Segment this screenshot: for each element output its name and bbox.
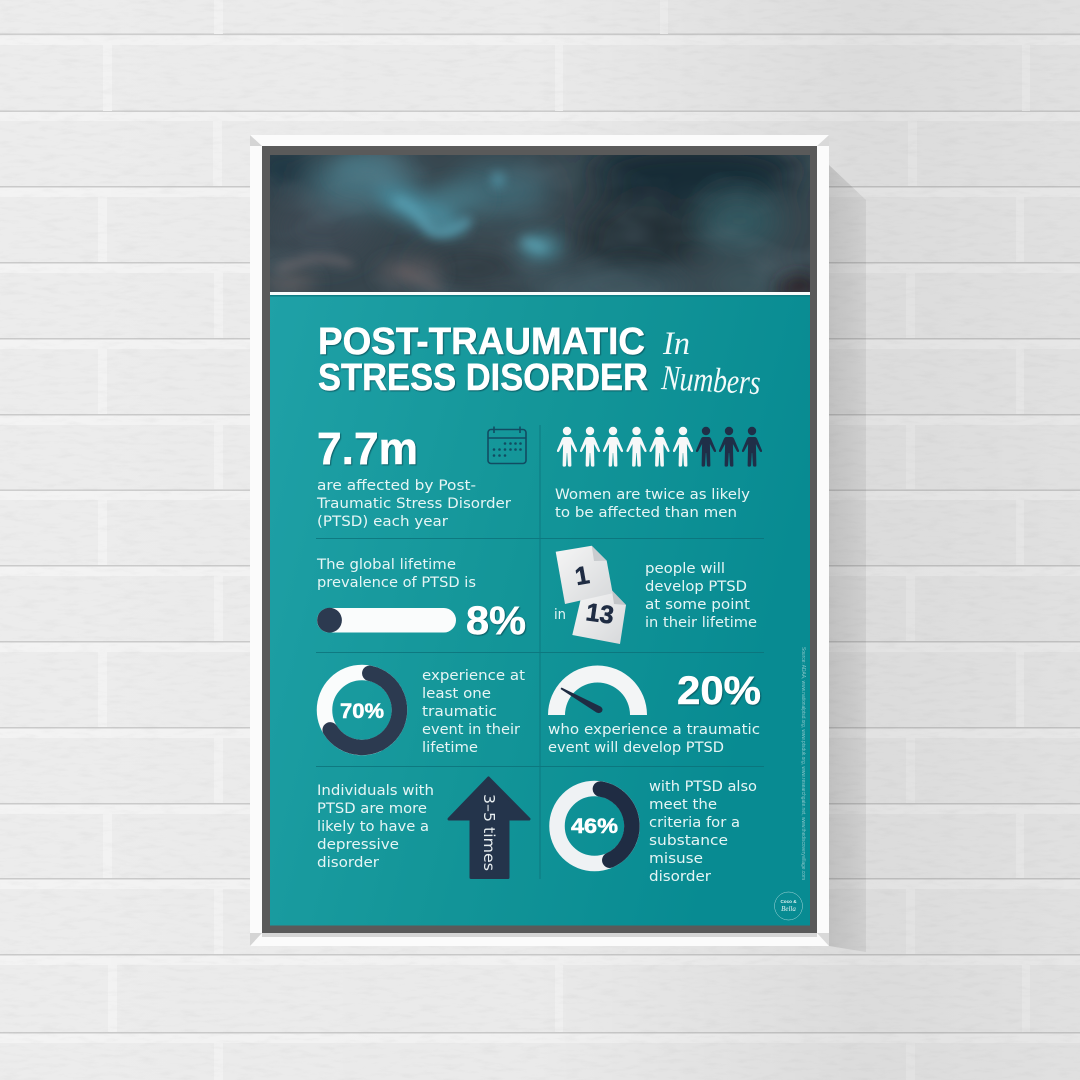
stat: 7.7m [316,423,526,530]
text: depressive disorder: depressive [317,836,399,853]
arrow: 3-5 times: 3–5 times [480,794,498,871]
text: depressive disorder: likely to have a [317,818,429,835]
text: substance misuse disorder: meet the [649,796,717,813]
logo: Coco and Bella [774,892,802,920]
text: who experience a traumatic event: who experience a traumatic [548,721,760,738]
stat: lifetime prevalence 8%: 8% [466,599,526,643]
text: affected by PTSD: are affected by Post- [317,477,476,494]
grid dividers [316,425,764,879]
text: women twice as likely [555,486,750,521]
text: people will develop: people will [645,560,725,577]
text: women twice as likely: to be affected than men [555,504,737,521]
text: experience a traumatic event: event in their [422,721,520,738]
donut chart: 46%: 46% [571,815,618,838]
teal poster panel [270,292,810,926]
text: experience a traumatic event [422,667,525,756]
logo: Coco and Bella: Bella [781,905,796,913]
text: substance misuse disorder: substance [649,832,728,849]
stat: lifetime prevalence 8%: The global lifetime [316,556,456,573]
script subtitle: In Numbers [660,326,761,402]
logo: Coco and Bella: Coco & [780,899,797,904]
text: who experience a traumatic event: event will develop PTSD [548,739,724,756]
text: depressive disorder [317,782,434,871]
pictogram: people, six women and three men [557,427,762,467]
stat: 7.7m: 7.7m [317,423,418,474]
icon: calendar [488,426,526,464]
icon: paper note 13 [572,590,626,644]
progress bar [317,608,456,633]
frame drop shadow [829,165,866,952]
icon: paper note 13: 13 [584,598,616,630]
script subtitle: In Numbers: In [662,326,690,362]
icon: paper note 1 [556,546,613,604]
text: women twice as likely: Women are twice as likely [555,486,750,503]
stat: 20%: 20% [677,669,761,713]
text: people will develop [645,560,757,631]
text: affected by PTSD: Traumatic Stress Disorder [316,495,511,512]
stat: lifetime prevalence 8% [316,556,526,643]
white poster frame [250,135,829,946]
arrow: 3-5 times [449,778,529,878]
text: people will develop: develop PTSD [645,578,747,595]
script subtitle: In Numbers: Numbers [660,358,761,402]
text: affected by PTSD: (PTSD) each year [317,513,448,530]
text: substance misuse disorder: disorder [649,868,711,885]
donut chart: 70% [324,672,400,748]
text: who experience a traumatic event [548,721,760,756]
text: experience a traumatic event: least one [422,685,491,702]
source note: Source: ADAA, www.nationalptsd.org, www.ptsduk.org, www.researchgate.net, www.thediscoveryvillage.com [800,647,806,880]
title [318,321,648,399]
donut chart: 70%: 70% [340,700,384,723]
text: depressive disorder: Individuals with [317,782,434,799]
storm cloud photo [270,155,810,292]
text: people will develop: at some point [645,596,750,613]
stat: 1 in 13: in [554,606,566,623]
text: experience a traumatic event: lifetime [422,739,478,756]
text: substance misuse disorder: with PTSD also [649,778,757,795]
title: POST-TRAUMATIC [318,321,645,363]
gauge chart: 20% [548,666,647,715]
text: people will develop: in their lifetime [645,614,757,631]
text: substance misuse disorder [649,778,757,885]
title: STRESS DISORDER [318,357,648,399]
text: substance misuse disorder: misuse [649,850,703,867]
text: substance misuse disorder: criteria for a [649,814,740,831]
text: experience a traumatic event: traumatic [422,703,497,720]
text: depressive disorder: PTSD are more [317,800,427,817]
donut chart: 46% [557,788,632,864]
stat: lifetime prevalence 8%: prevalence of PTSD is [317,574,476,591]
text: depressive disorder: disorder [317,854,379,871]
icon: paper note 1: 1 [573,561,592,591]
stat: 1 in 13 [554,546,757,644]
text: experience a traumatic event: experience at [422,667,525,684]
text: affected by PTSD [316,477,511,530]
